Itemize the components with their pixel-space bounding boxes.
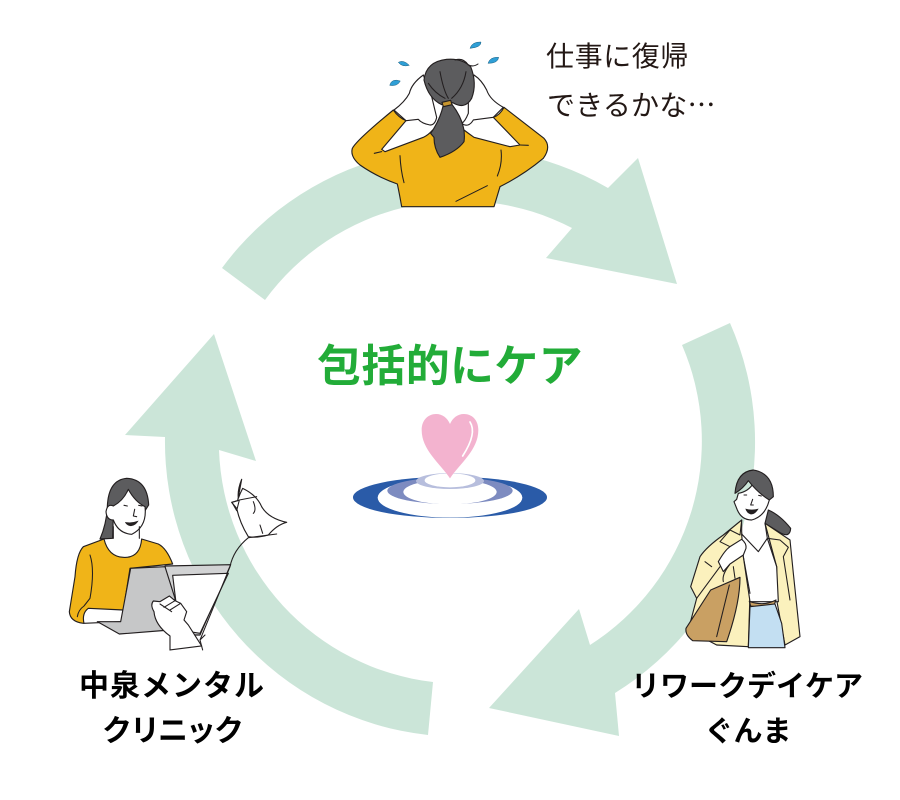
ponytail	[431, 104, 464, 157]
speech line 1: 仕事に復帰	[546, 41, 689, 72]
heart	[422, 414, 478, 478]
illustration: worried woman seen from behind	[352, 42, 548, 207]
man's finger lines	[160, 601, 181, 612]
bag strap	[723, 565, 735, 582]
day care name line 2: ぐんま	[704, 716, 792, 748]
clinic name line 1: 中泉メンタル	[79, 670, 265, 703]
outer ripple	[353, 477, 547, 518]
bag	[686, 577, 740, 642]
woman eyes and nose	[124, 505, 142, 517]
hair tie	[442, 100, 452, 107]
bag crease	[717, 585, 729, 637]
arm and hand	[718, 539, 746, 572]
cycle arrows	[125, 148, 755, 736]
arrow: top, towards right	[222, 148, 677, 300]
facial features	[744, 495, 761, 505]
woman white sleeve	[83, 608, 123, 623]
hair lines	[428, 72, 466, 98]
day care name line 1: リワークデイケア	[631, 669, 863, 703]
sweater	[352, 107, 548, 207]
speech line 2: できるかな…	[547, 84, 716, 124]
heading: 包括的にケア	[317, 342, 583, 391]
smile	[745, 509, 759, 514]
inner ripple	[416, 473, 484, 489]
label: rework day care	[631, 669, 863, 748]
sweat drops	[390, 42, 499, 86]
woman smile	[125, 521, 139, 526]
illustration: woman with bag	[686, 470, 800, 648]
coat arm	[697, 562, 720, 598]
man's hand	[152, 596, 202, 650]
right hand	[462, 75, 503, 125]
coat lapels	[720, 520, 790, 600]
woman face	[106, 489, 145, 534]
coat	[688, 520, 800, 647]
laptop	[97, 567, 175, 634]
clinic name line 2: クリニック	[102, 715, 242, 748]
middle white ring	[403, 480, 497, 504]
belt	[749, 600, 776, 607]
label: clinic	[79, 670, 265, 748]
hair fringe	[735, 470, 773, 500]
middle ripple	[387, 477, 513, 504]
man's shoulder	[200, 534, 277, 650]
shirt	[742, 534, 778, 602]
tablet white screen	[173, 573, 228, 633]
man's glasses	[232, 497, 263, 533]
speech text	[546, 41, 716, 124]
inner white ring	[425, 473, 475, 487]
sweater folds	[374, 145, 528, 201]
trousers	[748, 604, 785, 648]
heart highlight	[463, 422, 472, 456]
tablet screen back	[165, 565, 231, 635]
arrow: right, towards bottom	[489, 323, 755, 736]
head hair	[424, 59, 474, 105]
man's head	[232, 479, 287, 537]
outer white ring	[378, 478, 522, 518]
woman sweater	[69, 539, 173, 623]
icon: heart over water ripples	[353, 414, 547, 518]
face	[734, 483, 769, 520]
woman hair back	[100, 478, 149, 539]
ponytail	[765, 510, 791, 535]
woman sweater folds	[77, 555, 92, 617]
illustration: counselling scene	[69, 478, 287, 650]
arrow: bottom left, towards top	[125, 334, 433, 735]
woman neck	[113, 527, 139, 538]
hair strand	[455, 59, 478, 66]
left hand	[394, 75, 437, 125]
